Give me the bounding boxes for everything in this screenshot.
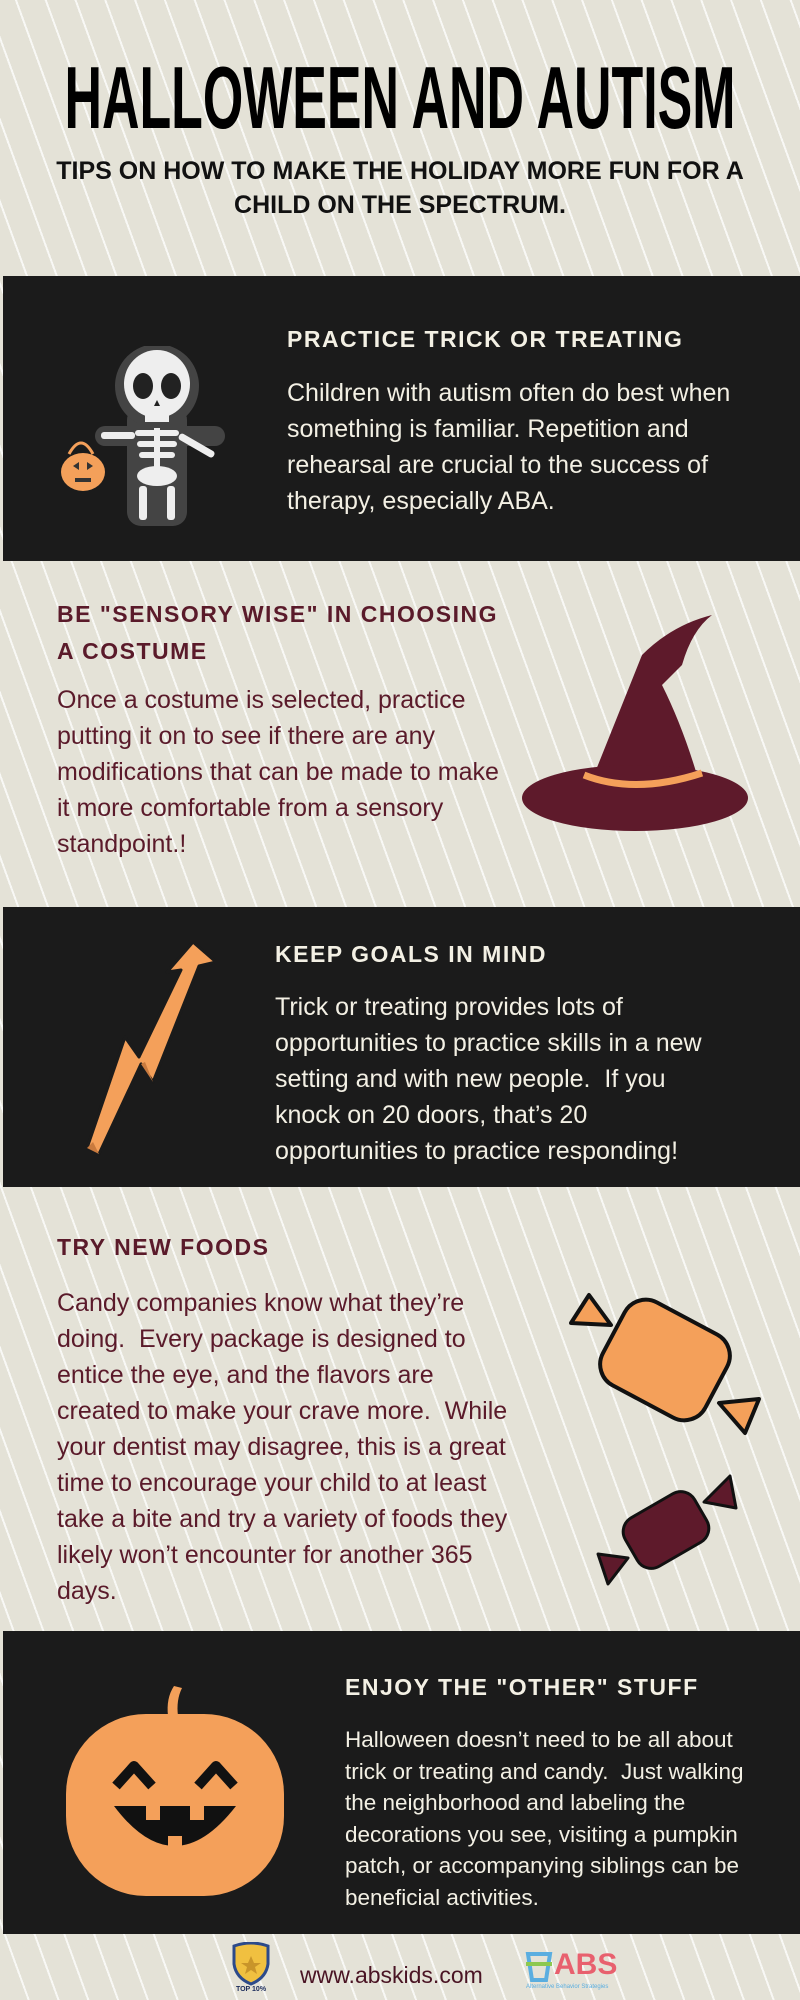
body text: trick or treating and candy. Just walking bbox=[345, 1759, 744, 1784]
website url: www.abskids.com bbox=[300, 1962, 483, 1988]
body text: beneficial activities. bbox=[345, 1885, 539, 1910]
panel: sensory wise costume bbox=[57, 601, 748, 858]
body text: decorations you see, visiting a pumpkin bbox=[345, 1822, 738, 1847]
body text: Halloween doesn’t need to be all about bbox=[345, 1727, 733, 1752]
subtitle: CHILD ON THE SPECTRUM. bbox=[234, 191, 566, 219]
logo: ABS bbox=[526, 1948, 617, 1990]
body text: take a bite and try a variety of foods they bbox=[57, 1505, 507, 1533]
logo: ABS: Alternative Behavior Strategies bbox=[526, 1984, 608, 1990]
title: HALLOWEEN AND AUTISM bbox=[64, 48, 736, 147]
body text: modifications that can be made to make bbox=[57, 758, 499, 786]
body text: opportunities to practice responding! bbox=[275, 1137, 678, 1165]
icon: jack-o-lantern bbox=[66, 1686, 284, 1896]
body text: rehearsal are crucial to the success of bbox=[287, 451, 708, 479]
body text: Children with autism often do best when bbox=[287, 379, 730, 407]
body text: days. bbox=[57, 1577, 117, 1605]
heading: PRACTICE TRICK OR TREATING bbox=[287, 326, 683, 352]
icon: small candy bbox=[596, 1474, 738, 1586]
body text: time to encourage your child to at least bbox=[57, 1469, 486, 1497]
body text: doing. Every package is designed to bbox=[57, 1325, 466, 1353]
panel: practice trick or treating bbox=[3, 276, 800, 561]
icon: skeleton with pumpkin bucket bbox=[61, 346, 225, 526]
heading: BE "SENSORY WISE" IN CHOOSING bbox=[57, 601, 498, 627]
logo: ABS: ABS bbox=[554, 1948, 617, 1981]
body text: something is familiar. Repetition and bbox=[287, 415, 689, 443]
body text: likely won’t encounter for another 365 bbox=[57, 1541, 473, 1569]
body text: standpoint.! bbox=[57, 830, 186, 858]
subtitle bbox=[56, 157, 744, 219]
body text: entice the eye, and the flavors are bbox=[57, 1361, 434, 1389]
body text: Trick or treating provides lots of bbox=[275, 993, 623, 1021]
subtitle: TIPS ON HOW TO MAKE THE HOLIDAY MORE FUN FOR A bbox=[56, 157, 744, 185]
body text bbox=[57, 1289, 508, 1605]
heading: KEEP GOALS IN MIND bbox=[275, 941, 547, 967]
body text: created to make your crave more. While bbox=[57, 1397, 507, 1425]
icon: top 10% badge bbox=[232, 1942, 270, 1992]
body text: opportunities to practice skills in a new bbox=[275, 1029, 702, 1057]
body text: therapy, especially ABA. bbox=[287, 487, 555, 515]
body text bbox=[345, 1727, 744, 1910]
body text: your dentist may disagree, this is a great bbox=[57, 1433, 506, 1461]
body text: knock on 20 doors, that’s 20 bbox=[275, 1101, 587, 1129]
icon: large candy bbox=[569, 1292, 761, 1436]
body text: Once a costume is selected, practice bbox=[57, 686, 466, 714]
heading bbox=[57, 601, 498, 664]
body text bbox=[287, 379, 730, 515]
footer bbox=[232, 1942, 617, 1992]
icon: rising zigzag arrow bbox=[87, 944, 213, 1154]
body text: patch, or accompanying siblings can be bbox=[345, 1853, 739, 1878]
body text bbox=[275, 993, 702, 1165]
heading: ENJOY THE "OTHER" STUFF bbox=[345, 1674, 699, 1700]
heading: A COSTUME bbox=[57, 638, 208, 664]
body text: putting it on to see if there are any bbox=[57, 722, 435, 750]
panel: keep goals in mind bbox=[3, 907, 800, 1187]
icon: witch hat bbox=[522, 615, 748, 831]
body text: it more comfortable from a sensory bbox=[57, 794, 443, 822]
panel: enjoy the other stuff bbox=[3, 1631, 800, 1934]
body text: the neighborhood and labeling the bbox=[345, 1790, 685, 1815]
body text: Candy companies know what they’re bbox=[57, 1289, 464, 1317]
body text bbox=[57, 686, 499, 858]
body text: setting and with new people. If you bbox=[275, 1065, 666, 1093]
heading: TRY NEW FOODS bbox=[57, 1234, 269, 1260]
panel: try new foods bbox=[57, 1234, 761, 1605]
